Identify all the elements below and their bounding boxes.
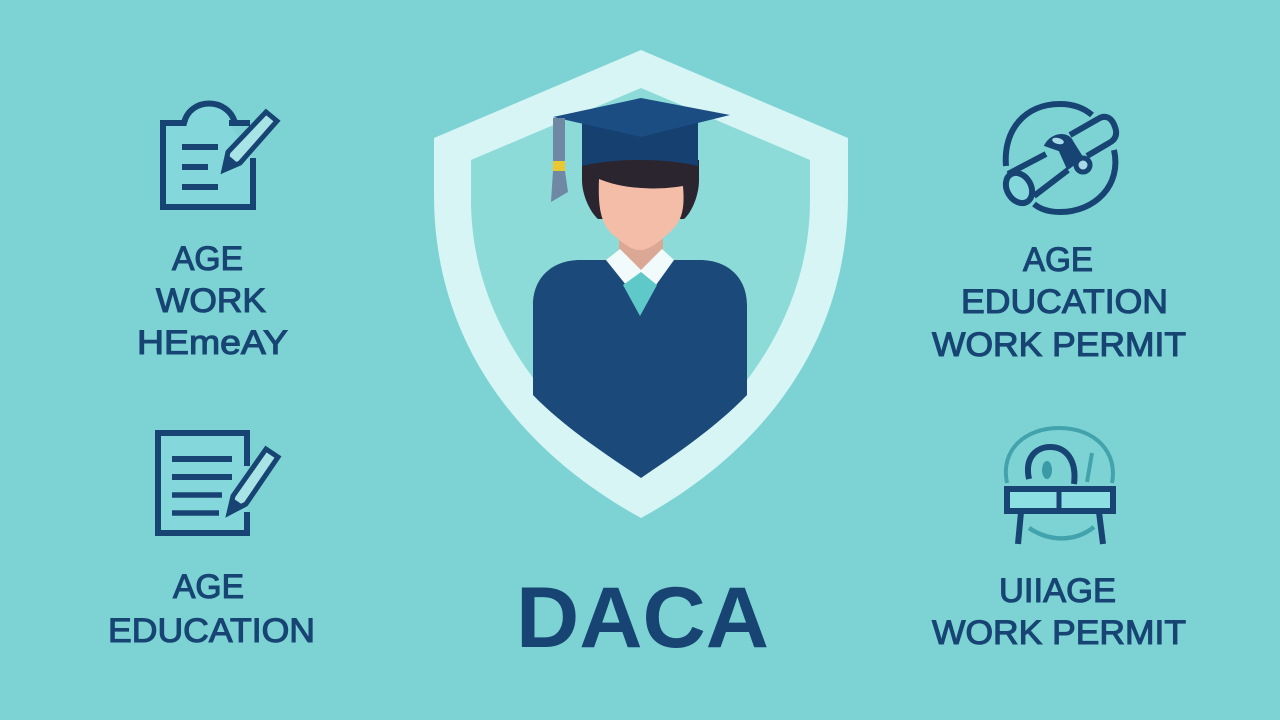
label: top right [932, 241, 1186, 364]
tassel end [551, 171, 568, 202]
face [599, 179, 684, 250]
neck [619, 235, 663, 275]
icon: diploma in circle [1001, 104, 1116, 212]
cap board [553, 98, 730, 137]
label: bottom right: WORK PERMIT [932, 614, 1186, 652]
shield with graduate [434, 50, 848, 518]
tassel cord [553, 118, 565, 161]
title: DACA: DACA [516, 570, 769, 666]
hair [582, 160, 699, 219]
label: bottom right: UIIAGE [999, 572, 1116, 610]
gown [533, 260, 747, 478]
label: top left: AGE [172, 240, 243, 278]
label: bottom left: AGE [173, 568, 244, 606]
cap crown [582, 120, 698, 166]
label: top left [137, 240, 288, 362]
graduate figure [533, 98, 747, 478]
label: top right: WORK PERMIT [932, 326, 1186, 364]
shirt [623, 272, 657, 316]
label: bottom left [108, 568, 315, 650]
label: bottom left: EDUCATION [108, 612, 315, 650]
shield inner field [471, 88, 810, 476]
label: top right: EDUCATION [961, 283, 1168, 321]
collar [606, 249, 674, 285]
shield outer band [434, 50, 848, 518]
label: top left: HEmeAY [137, 324, 288, 362]
tassel [551, 118, 568, 202]
label: top left: WORK [156, 282, 266, 320]
tassel band [553, 161, 565, 171]
label: bottom right [932, 572, 1186, 652]
icon: clipboard and pencil [163, 104, 277, 207]
icon: desk with open book [1006, 428, 1113, 544]
label: top right: AGE [1023, 241, 1093, 279]
icon: document and pencil [158, 433, 278, 533]
